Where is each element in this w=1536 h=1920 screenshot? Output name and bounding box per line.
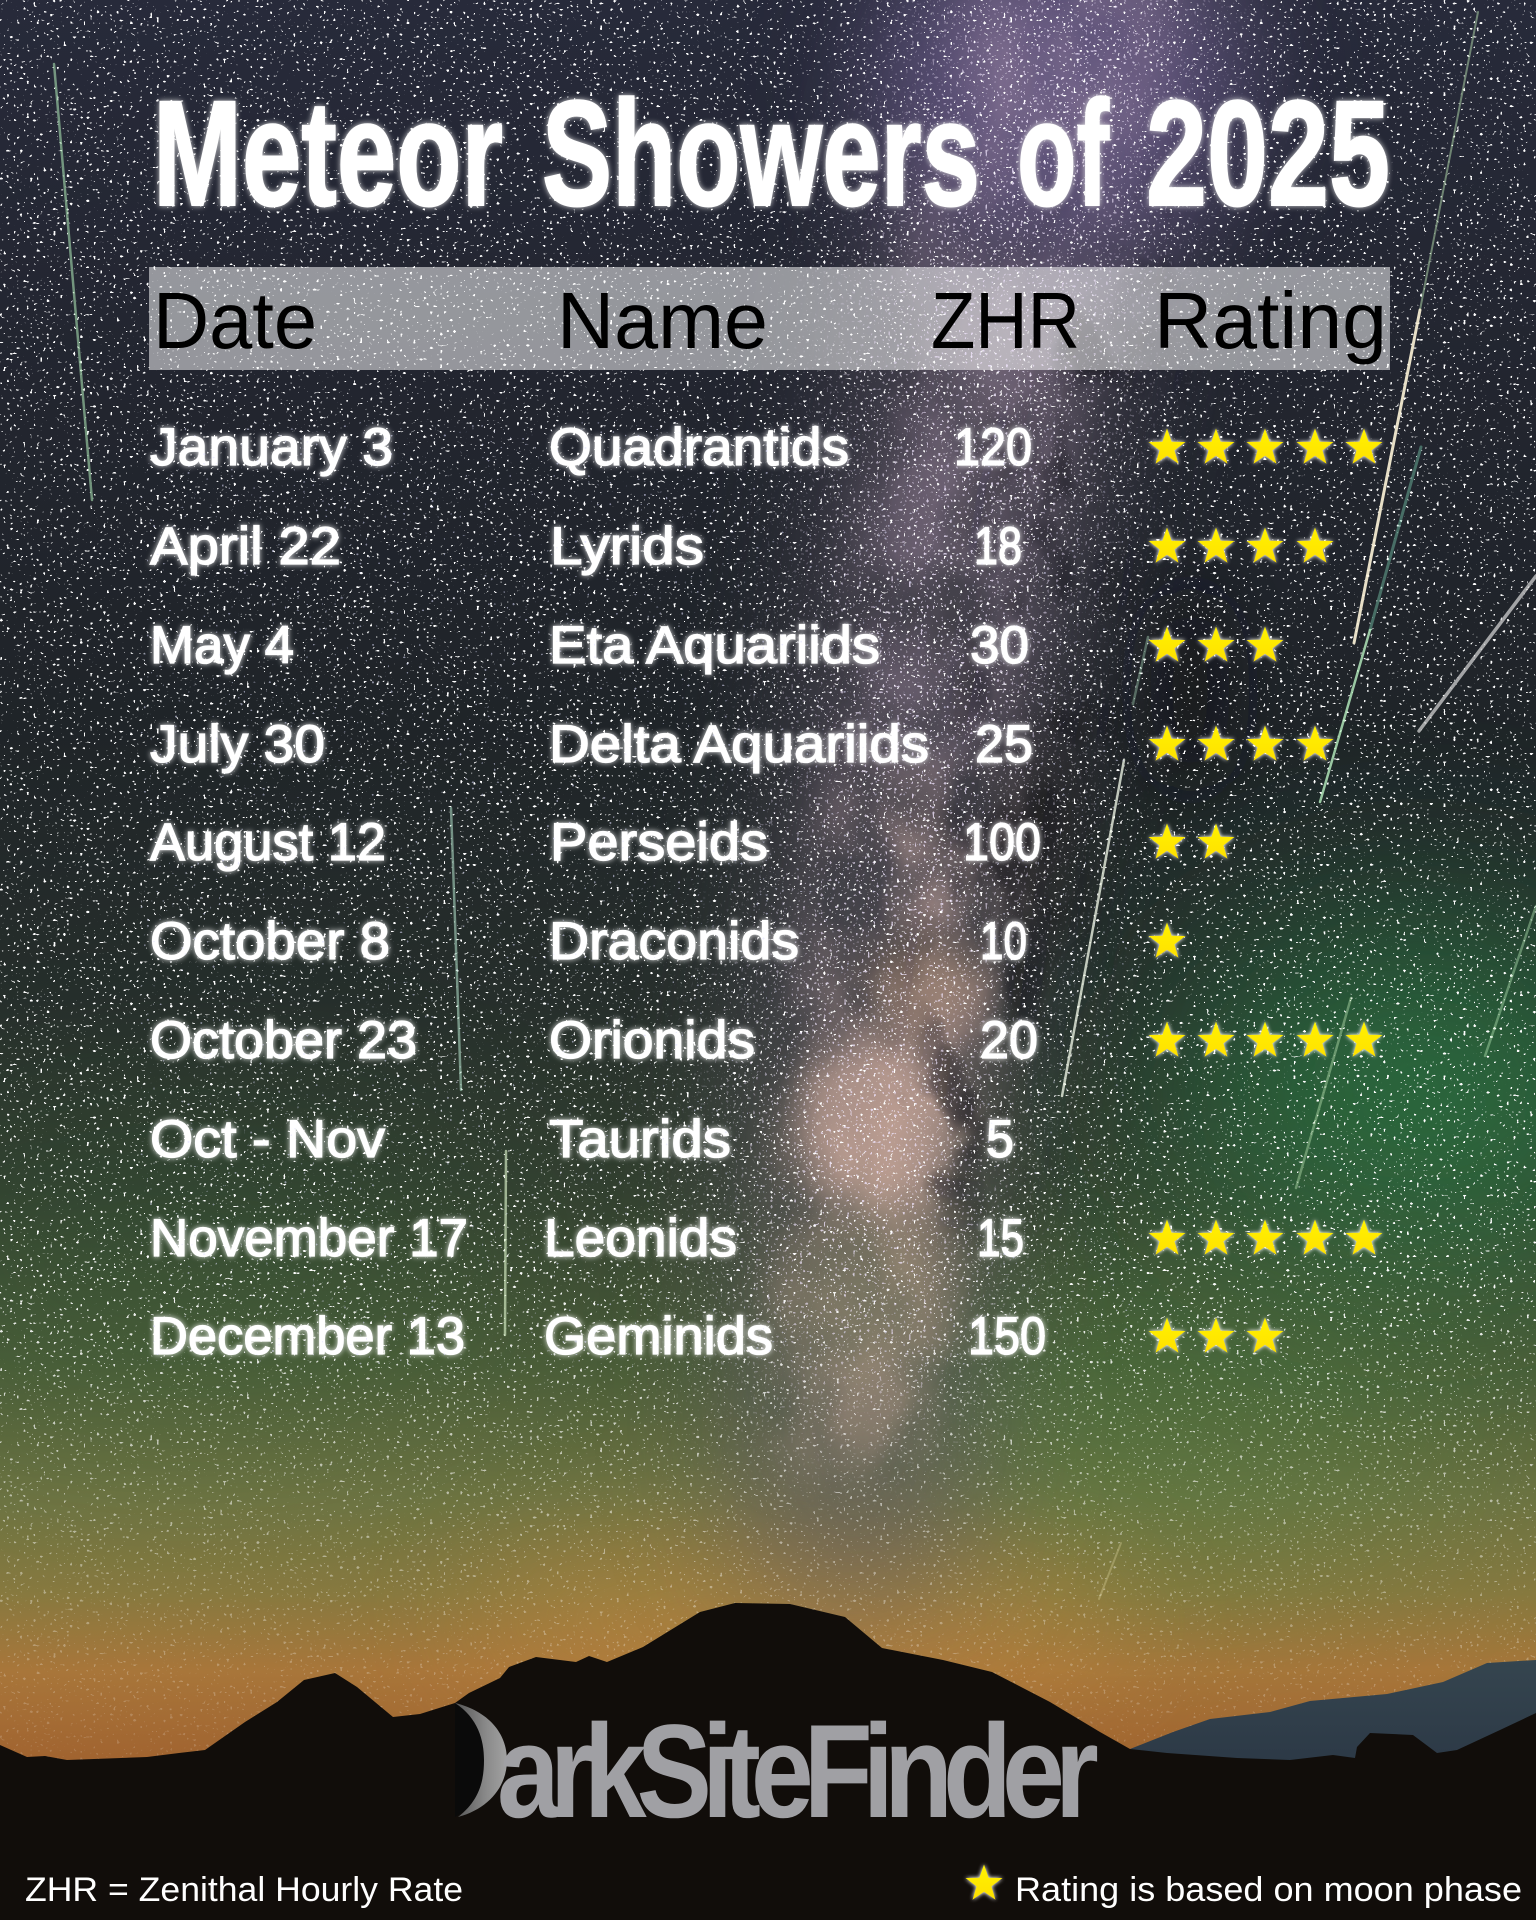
row: October 8: 10 [980, 912, 1027, 971]
distant blue hills [1130, 1660, 1536, 1790]
row: July 30: 25 [975, 715, 1033, 774]
row: May 4: Eta Aquariids [549, 616, 880, 675]
row: May 4: May 4 [150, 616, 294, 675]
mountain silhouette [0, 1603, 1536, 1920]
row: April 22 [150, 517, 1334, 576]
row: July 30: Delta Aquariids [549, 715, 929, 774]
row: May 4 [150, 616, 1284, 675]
title: of [1017, 69, 1110, 237]
row: November 17: Leonids [544, 1209, 737, 1268]
row: January 3: Quadrantids [549, 418, 849, 477]
meteor streaks [54, 12, 1536, 1599]
row: December 13: Geminids [544, 1307, 773, 1366]
row: December 13: December 13 [150, 1307, 465, 1366]
milky way dust lanes [960, 200, 1150, 1200]
title: Meteor [153, 69, 503, 237]
shower table [150, 418, 1382, 1366]
row: August 12: 100 [963, 813, 1041, 872]
row: October 23: October 23 [150, 1011, 417, 1070]
row: July 30: July 30 [150, 715, 325, 774]
row: October 23 [150, 1011, 1382, 1070]
logo: DarkSiteFinder [455, 1697, 1099, 1846]
row: July 30 [150, 715, 1334, 774]
row: May 4: 30 [970, 616, 1029, 675]
row: January 3: January 3 [150, 418, 393, 477]
row: January 3: 120 [954, 418, 1032, 477]
row: January 3 [150, 418, 1382, 477]
icon: footnote star [966, 1864, 1002, 1900]
title: 2025 [1146, 69, 1390, 237]
row: Oct - Nov [150, 1110, 1014, 1169]
row: November 17 [150, 1209, 1382, 1268]
row: April 22: 18 [974, 517, 1022, 576]
row: Oct - Nov: 5 [986, 1110, 1014, 1169]
row: October 23: 20 [980, 1011, 1038, 1070]
row: November 17: November 17 [150, 1209, 468, 1268]
logo wordmark: arkSiteFinder [497, 1697, 1099, 1846]
row: October 8: Draconids [549, 912, 799, 971]
row: October 8: October 8 [150, 912, 390, 971]
row: October 23: Orionids [549, 1011, 755, 1070]
row: April 22: Lyrids [550, 517, 704, 576]
header: name: Name [557, 276, 768, 365]
row: October 8 [150, 912, 1186, 971]
row: Oct - Nov: Taurids [549, 1110, 731, 1169]
title [153, 69, 1390, 237]
header: rating: Rating [1154, 276, 1387, 365]
logo moon crescent [455, 1703, 507, 1817]
title: Showers [542, 69, 980, 237]
row: August 12: Perseids [550, 813, 768, 872]
header: ZHR: ZHR [931, 276, 1080, 365]
milky way mottled light clouds [860, 0, 1080, 1460]
footnote: rating explanation: Rating is based on moon phase [1015, 1871, 1522, 1909]
row: November 17: 15 [977, 1209, 1024, 1268]
row: August 12 [150, 813, 1234, 872]
stars over table text [140, 420, 1140, 1370]
row: Oct - Nov: Oct - Nov [150, 1110, 386, 1169]
table header bar [149, 267, 1390, 370]
row: December 13 [150, 1307, 1284, 1366]
row: December 13: 150 [968, 1307, 1046, 1366]
row: April 22: April 22 [150, 517, 341, 576]
row: August 12: August 12 [150, 813, 386, 872]
header: date: Date [153, 276, 317, 365]
footnote: ZHR definition: ZHR = Zenithal Hourly Rate [25, 1871, 463, 1909]
table header labels [153, 276, 1387, 365]
